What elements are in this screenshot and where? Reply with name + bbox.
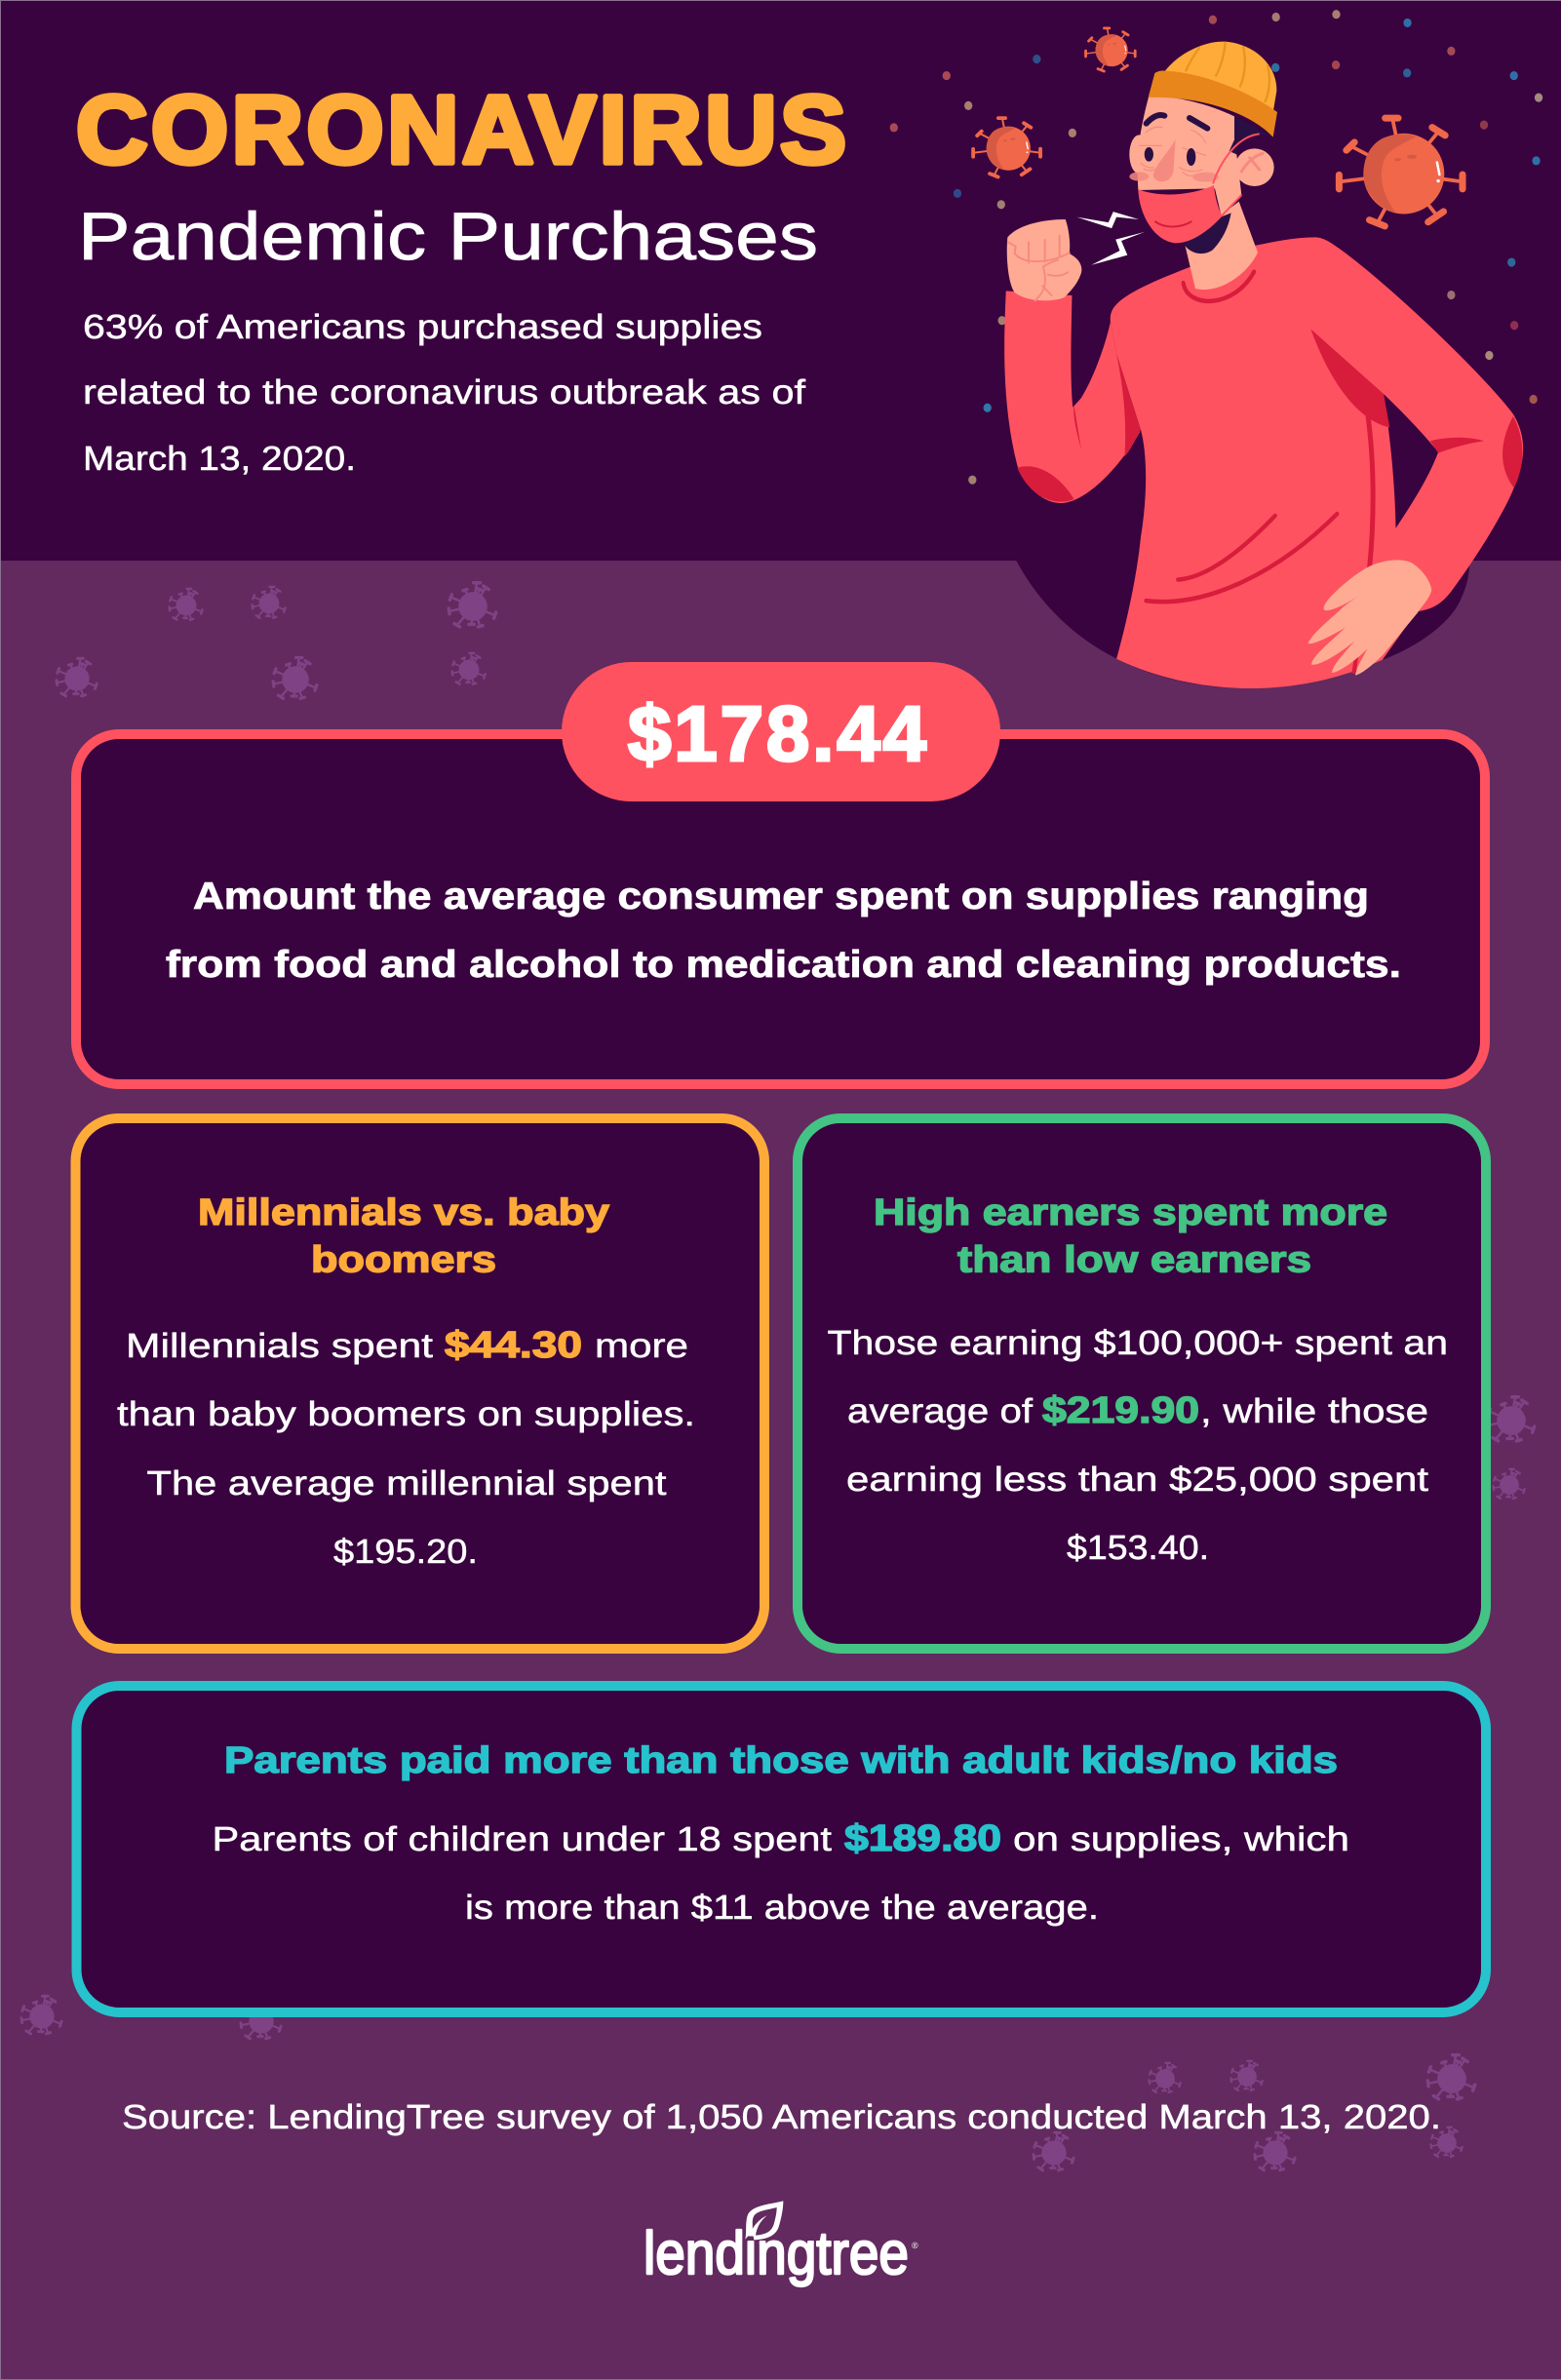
body: millennials: more (595, 1327, 688, 1365)
stat pill: $178.44: $178.44 (628, 690, 926, 777)
body: high earners (827, 1324, 1448, 1567)
heading: high earners (874, 1192, 1387, 1281)
heading: millennials: boomers (311, 1240, 496, 1281)
head with hat and mask (1129, 42, 1277, 290)
fist (1007, 219, 1081, 300)
header band (0, 0, 1561, 561)
body: high earners: $153.40. (1067, 1529, 1209, 1567)
body: millennials: than baby boomers on supplies. (117, 1395, 695, 1433)
heading: millennials (198, 1192, 609, 1281)
panel: average spend (76, 662, 1485, 1084)
panel: parents (76, 1686, 1486, 2012)
illustration: coughing man with mask and viruses (890, 10, 1542, 688)
source note: Source: LendingTree survey of 1,050 Americans conducted March 13, 2020. (122, 2098, 1441, 2136)
heading: parents: Parents paid more than those with adult kids/no kids (224, 1740, 1338, 1781)
average spend description: Amount the average consumer spent on supplies ranging (193, 876, 1369, 917)
body: parents: is more than $11 above the average. (465, 1889, 1099, 1927)
heading: millennials: Millennials vs. baby (198, 1192, 609, 1233)
body: parents: on supplies, which (1013, 1820, 1349, 1858)
body: high earners: , while those (1200, 1392, 1428, 1430)
heading: high earners: than low earners (957, 1240, 1311, 1281)
panel: millennials vs baby boomers (76, 1118, 764, 1649)
body: high earners: average of (847, 1392, 1033, 1430)
intro text: March 13, 2020. (83, 440, 356, 478)
body: high earners: earning less than $25,000 spent (846, 1461, 1428, 1499)
intro text: 63% of Americans purchased supplies (83, 308, 762, 346)
logo: lendingtree: ® (912, 2241, 918, 2250)
body: millennials: $44.30 (445, 1325, 582, 1366)
intro text (83, 308, 805, 478)
body: millennials: Millennials spent (126, 1327, 433, 1365)
body: millennials: $195.20. (333, 1533, 478, 1571)
background virus pattern (21, 583, 1535, 2170)
panel: high earners (798, 1118, 1486, 1649)
body: parents: $189.80 (844, 1818, 1001, 1859)
body: millennials: The average millennial spent (146, 1464, 667, 1502)
body: parents (213, 1818, 1349, 1927)
heading: high earners: High earners spent more (874, 1192, 1387, 1233)
subtitle: Pandemic Purchases: Pandemic Purchases (78, 199, 818, 274)
body: high earners: Those earning $100,000+ spent an (827, 1324, 1448, 1362)
hand on hip (1308, 560, 1431, 676)
average spend description (166, 876, 1401, 986)
stat pill: $178.44 (562, 662, 1000, 801)
body: parents: Parents of children under 18 spent (213, 1820, 832, 1858)
logo: lendingtree: lendingtree (644, 2220, 909, 2287)
body: millennials (117, 1325, 695, 1571)
body: high earners: $219.90 (1042, 1390, 1199, 1431)
title: CORONAVIRUS: CORONAVIRUS (76, 75, 846, 183)
intro text: related to the coronavirus outbreak as of (83, 373, 805, 411)
average spend description: from food and alcohol to medication and cleaning products. (166, 944, 1401, 986)
